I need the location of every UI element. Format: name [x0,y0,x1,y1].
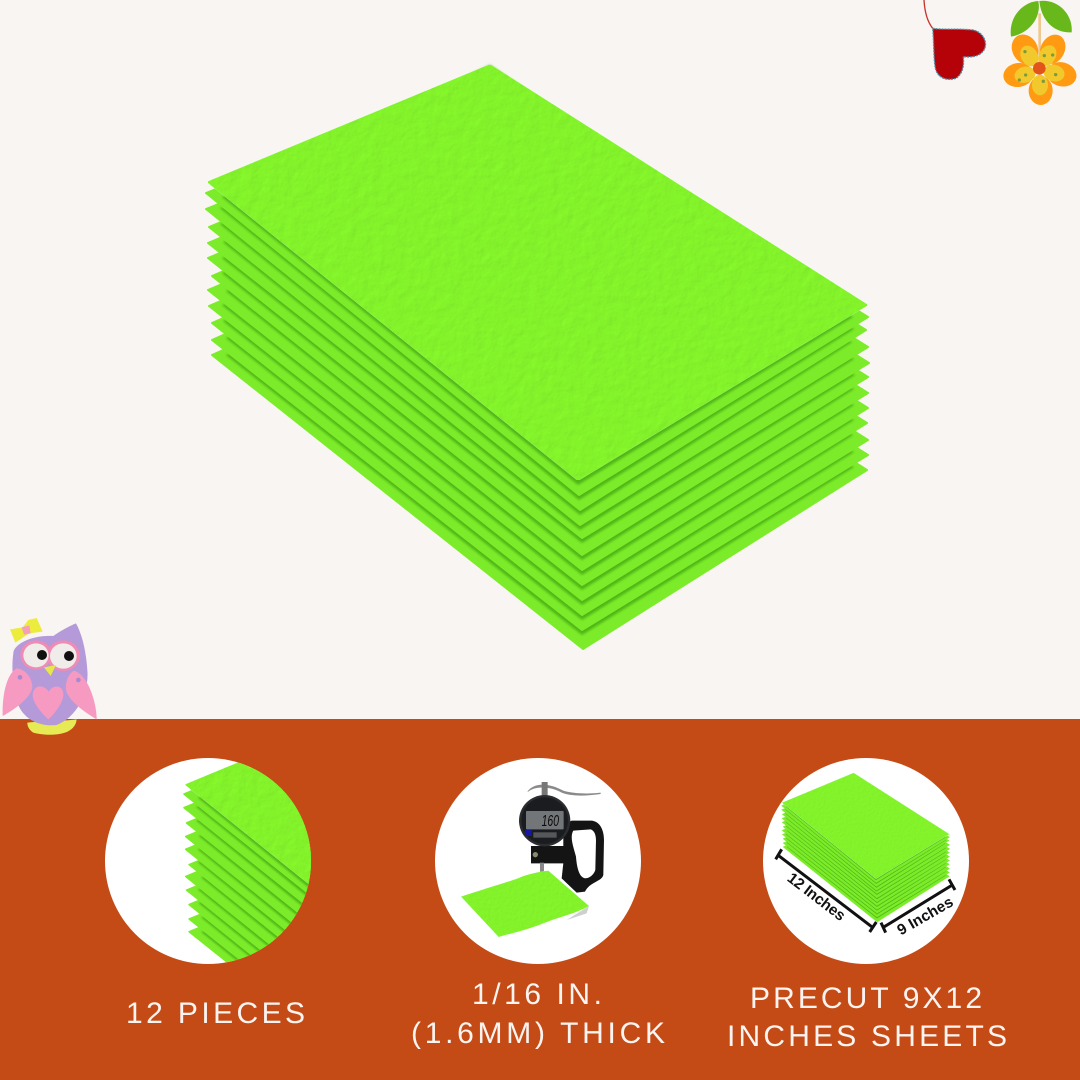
panel: size [727,758,1007,1053]
icon: orange felt flower ornament [1002,1,1079,105]
circle: sheet size [763,758,969,964]
icon: thickness gauge with felt [461,782,604,937]
icon: thickness gauge with felt: 160 [542,813,559,830]
label: 12 pieces: 12 PIECES [126,997,305,1030]
dimension: 12 inches: 12 Inches [784,870,848,925]
panel: thickness: (1.6MM) THICK [411,1017,665,1050]
icon: red felt heart ornament [924,0,986,79]
label: size: PRECUT 9X12 [750,982,982,1015]
label: thickness: 1/16 IN. [472,978,602,1011]
image: stack edge close-up [183,762,311,962]
image: small felt stack [782,773,950,922]
orange bottom band [0,719,1080,1080]
main felt sheet stack [206,65,869,649]
dimension: 9 inches [881,879,956,939]
panel: size: INCHES SHEETS [727,1020,1007,1053]
circle: thickness gauge [435,758,641,964]
circle: stack close-up [105,758,311,964]
panel: thickness [411,758,665,1050]
dimension: 12 inches [776,849,876,932]
panel: 12 pieces [105,758,311,1024]
icon: felt owl [3,618,97,735]
dimension: 9 inches: 9 Inches [894,894,956,939]
